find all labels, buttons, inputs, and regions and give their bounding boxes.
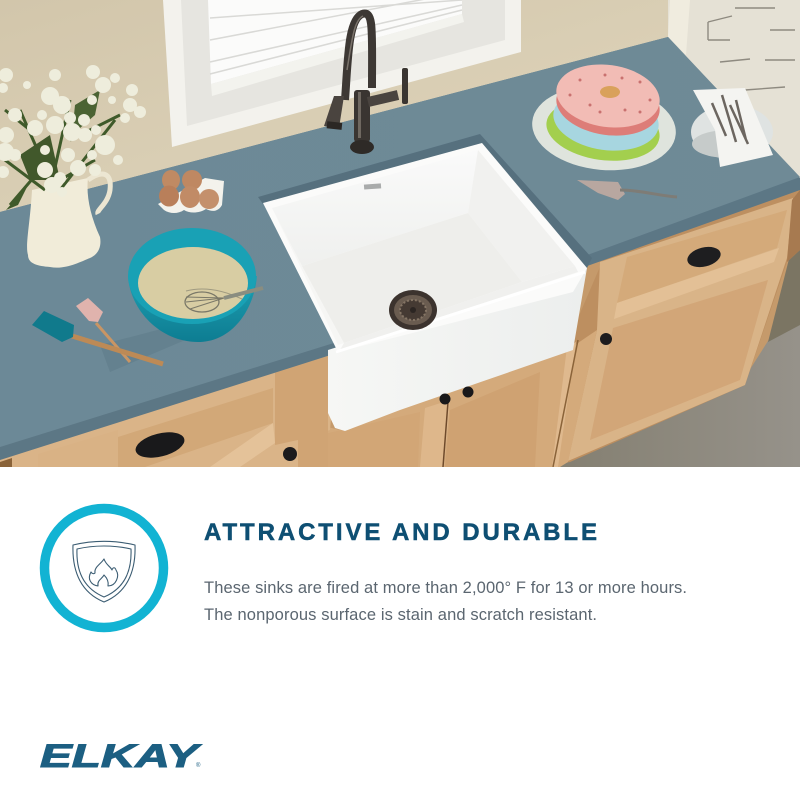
logo: Elkay	[40, 738, 204, 774]
sink cabinet knob left	[440, 394, 450, 404]
vase of white flowers	[0, 65, 146, 268]
description text: The nonporous surface is stain and scratch resistant.	[204, 606, 597, 624]
icon: fire-resistant shield badge	[40, 504, 168, 632]
teal ring	[44, 508, 164, 628]
drain strainer	[389, 290, 437, 330]
pitcher	[27, 178, 100, 268]
cabinet: right with drawer and door	[545, 188, 800, 467]
basin back wall	[272, 150, 478, 266]
sink cabinet knob right	[462, 386, 474, 398]
brick wall	[668, 0, 800, 185]
basin right wall	[468, 150, 575, 282]
cabinet: centre doors below sink	[298, 330, 597, 467]
cake on plate	[529, 58, 679, 176]
spatulas	[32, 298, 163, 364]
basin left wall	[272, 208, 344, 345]
logo: Elkay: ®	[196, 762, 201, 769]
drawer handle	[685, 244, 723, 270]
door knob	[600, 333, 612, 345]
door knob	[283, 447, 297, 461]
description text	[204, 579, 687, 624]
sink rim	[263, 143, 587, 352]
heading: ATTRACTIVE AND DURABLE	[204, 519, 597, 546]
sink front apron	[328, 268, 587, 431]
description text: These sinks are fired at more than 2,000° F for 13 or more hours.	[204, 579, 687, 597]
egg tray	[158, 170, 224, 213]
drawer handle	[133, 428, 187, 462]
window frame and blinds	[163, 0, 521, 147]
cake server	[577, 180, 677, 200]
flower stems and leaves	[5, 100, 120, 205]
basin floor	[302, 213, 522, 343]
plates, napkin and forks	[691, 88, 773, 167]
cabinet: left drawer	[0, 350, 337, 467]
faucet	[324, 14, 408, 154]
countertop	[0, 37, 800, 460]
wood base under the counter	[0, 240, 800, 467]
shield and flame	[73, 541, 135, 602]
mixing bowl with batter and whisk	[128, 228, 263, 342]
flower blossoms	[0, 65, 146, 197]
overflow badge	[364, 183, 381, 190]
logo: Elkay: ELKAY	[40, 738, 202, 774]
photo: farmhouse kitchen sink scene	[0, 0, 800, 467]
wall	[0, 0, 800, 240]
farmhouse sink	[263, 143, 587, 431]
floor	[530, 240, 800, 467]
